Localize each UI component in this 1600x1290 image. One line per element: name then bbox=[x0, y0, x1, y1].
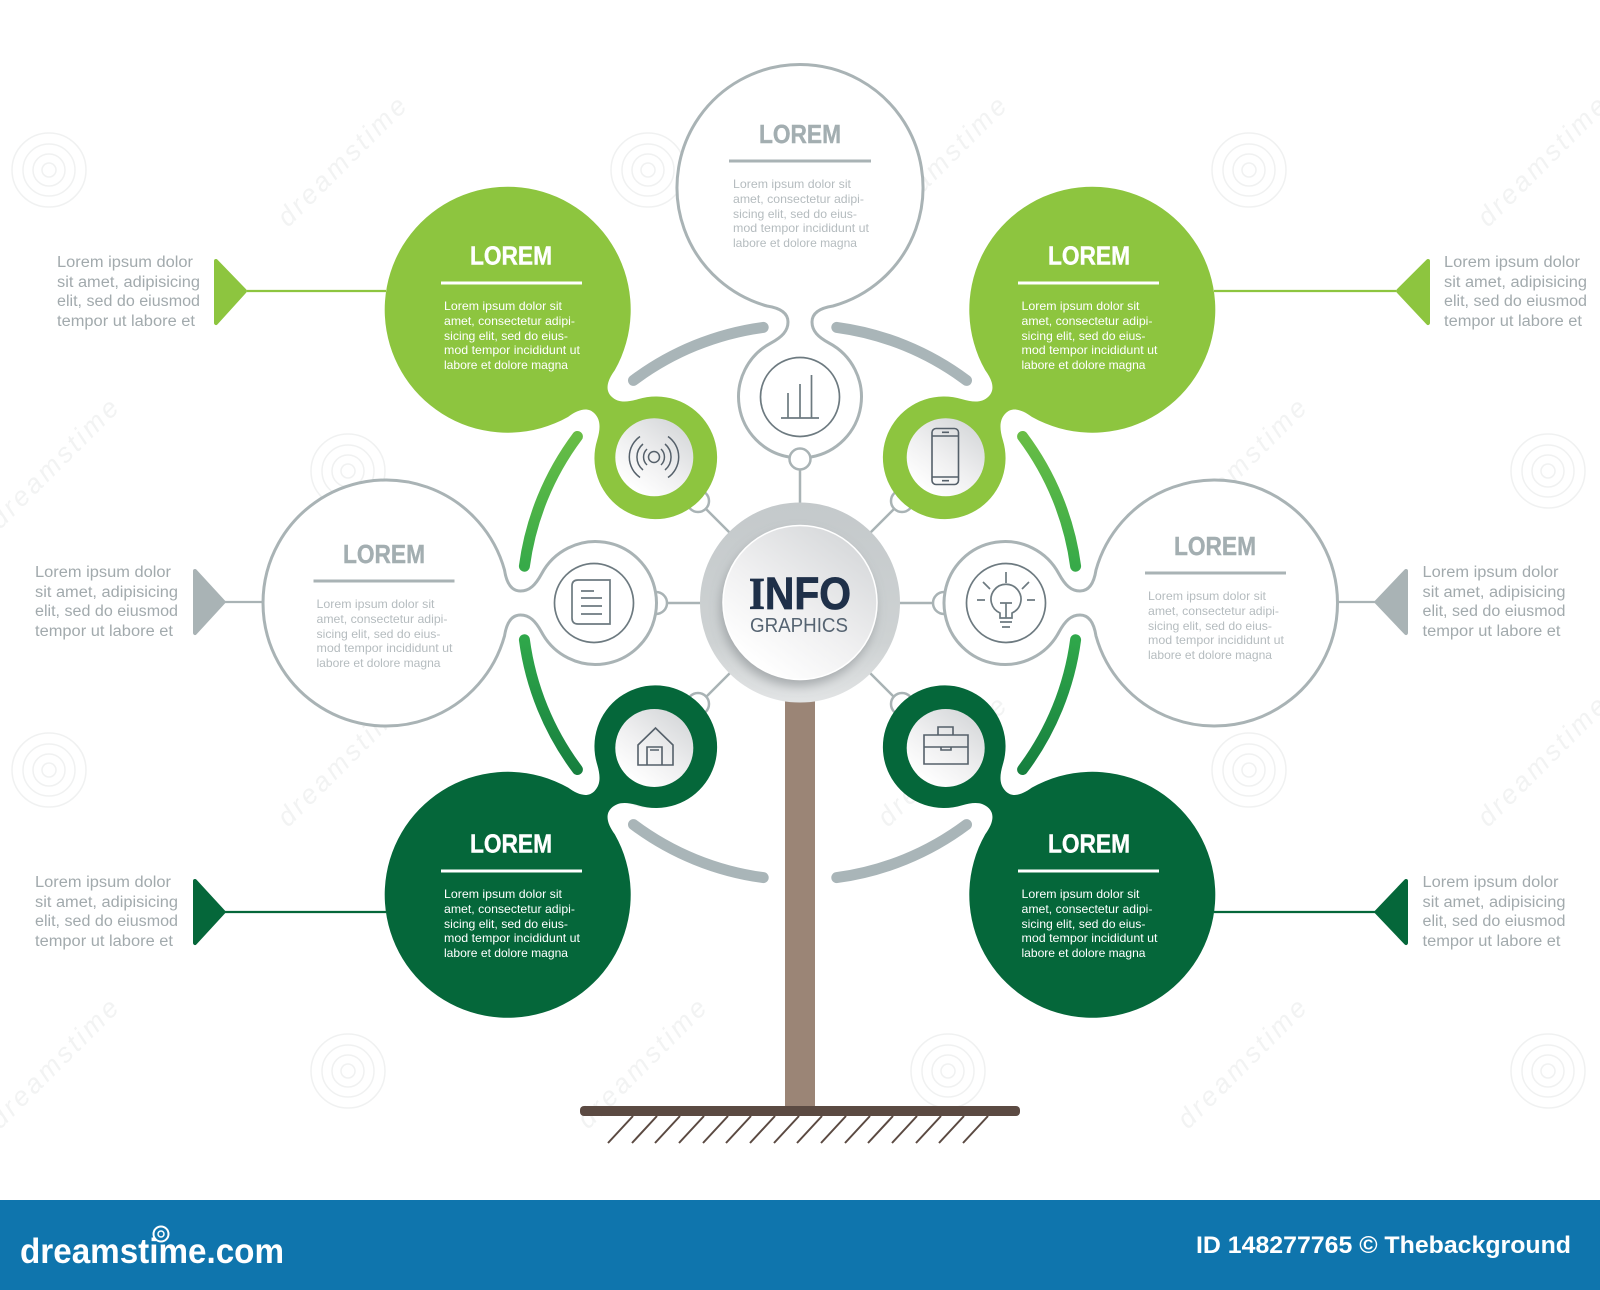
callout: left: elit, sed do eiusmod bbox=[35, 603, 178, 620]
callout: upper right bbox=[1214, 254, 1587, 330]
text: upper right circle bbox=[1018, 240, 1159, 372]
text: right circle: Lorem ipsum dolor sit bbox=[1148, 589, 1267, 603]
callout: lower left bbox=[35, 874, 386, 950]
callout: lower left: elit, sed do eiusmod bbox=[35, 913, 178, 930]
callout: lower left: sit amet, adipisicing bbox=[35, 894, 178, 911]
icon: briefcase bbox=[907, 709, 985, 787]
petal: left outline bbox=[263, 480, 656, 726]
ground with hatching bbox=[580, 1106, 1020, 1143]
text: lower right circle: sicing elit, sed do eius- bbox=[1022, 917, 1146, 931]
text: upper left circle bbox=[441, 240, 582, 372]
connector lines from hub to petals bbox=[645, 470, 955, 715]
icon: bar chart bbox=[760, 358, 840, 436]
text: lower left circle bbox=[441, 828, 582, 960]
callout: lower right: Lorem ipsum dolor bbox=[1422, 874, 1558, 891]
callout: left bbox=[35, 564, 263, 640]
watermark: dreamstime bbox=[871, 691, 1012, 832]
callout: left: tempor ut labore et bbox=[35, 623, 174, 640]
callout: lower right: sit amet, adipisicing bbox=[1422, 894, 1566, 911]
text: left circle: LOREM bbox=[343, 539, 425, 569]
text: upper left circle: mod tempor incididunt ut bbox=[444, 343, 581, 357]
callout: upper right: elit, sed do eiusmod bbox=[1444, 293, 1587, 310]
text: top circle: sicing elit, sed do eius- bbox=[733, 207, 857, 221]
callout: upper left: Lorem ipsum dolor bbox=[57, 254, 193, 271]
text: lower left circle: Lorem ipsum dolor sit bbox=[444, 887, 563, 901]
text: right circle: labore et dolore magna bbox=[1148, 648, 1272, 662]
text: right circle: LOREM bbox=[1174, 531, 1256, 561]
icon: smartphone bbox=[907, 418, 985, 496]
callout: upper right: Lorem ipsum dolor bbox=[1444, 254, 1580, 271]
callout: lower right: elit, sed do eiusmod bbox=[1422, 913, 1566, 930]
watermark: dreamstime bbox=[1171, 393, 1312, 534]
footer image id: ID 148277765 © Thebackground bbox=[1196, 1232, 1571, 1259]
callout: right: sit amet, adipisicing bbox=[1422, 584, 1566, 601]
callout: lower right bbox=[1214, 874, 1566, 950]
callout: upper left: elit, sed do eiusmod bbox=[57, 293, 200, 310]
petal: right outline bbox=[944, 480, 1337, 726]
arcs between petals bbox=[524, 327, 1076, 878]
text: right circle bbox=[1145, 531, 1286, 662]
text: lower right circle: Lorem ipsum dolor sit bbox=[1022, 887, 1140, 901]
callout: upper right: tempor ut labore et bbox=[1444, 313, 1583, 330]
callout: left: sit amet, adipisicing bbox=[35, 584, 178, 601]
text: upper right circle: labore et dolore magna bbox=[1022, 358, 1146, 372]
text: top circle: Lorem ipsum dolor sit bbox=[733, 177, 852, 191]
icon: document bbox=[554, 564, 634, 642]
text: upper left circle: labore et dolore magna bbox=[444, 358, 568, 372]
text: lower right circle: amet, consectetur adipi- bbox=[1022, 902, 1153, 916]
text: left circle: amet, consectetur adipi- bbox=[316, 612, 448, 626]
callout: upper right: sit amet, adipisicing bbox=[1444, 274, 1587, 291]
callout: right: elit, sed do eiusmod bbox=[1422, 603, 1566, 620]
watermark: dreamstime bbox=[271, 691, 412, 832]
callout: upper left bbox=[57, 254, 386, 330]
text: upper left circle: sicing elit, sed do eius- bbox=[444, 329, 568, 343]
watermark: dreamstime bbox=[271, 91, 412, 232]
tree trunk bbox=[785, 690, 815, 1110]
callout: right: Lorem ipsum dolor bbox=[1422, 564, 1558, 581]
text: right circle: sicing elit, sed do eius- bbox=[1148, 619, 1272, 633]
callout: upper left: sit amet, adipisicing bbox=[57, 274, 200, 291]
petal: lower right dark green bbox=[814, 617, 1266, 1069]
petal: upper right green bbox=[814, 136, 1266, 588]
watermark: dreamstime bbox=[571, 993, 712, 1134]
callout: right bbox=[1337, 564, 1566, 640]
text: lower right circle: labore et dolore magna bbox=[1022, 946, 1146, 960]
text: left circle: labore et dolore magna bbox=[316, 656, 441, 670]
hub title INFO: INFO bbox=[749, 568, 851, 619]
icon: light bulb bbox=[966, 564, 1046, 642]
text: top circle: amet, consectetur adipi- bbox=[733, 192, 864, 206]
text: lower right circle bbox=[1018, 828, 1159, 960]
text: lower right circle: mod tempor incididunt ut bbox=[1022, 931, 1158, 945]
petal: upper left green bbox=[334, 136, 786, 588]
footer logo: dreamstime.com bbox=[20, 1232, 284, 1271]
text: left circle: Lorem ipsum dolor sit bbox=[316, 597, 435, 611]
text: lower left circle: mod tempor incididunt ut bbox=[444, 931, 581, 945]
node: top bbox=[790, 448, 810, 470]
text: right circle: amet, consectetur adipi- bbox=[1148, 604, 1279, 618]
callout: lower right: tempor ut labore et bbox=[1422, 933, 1561, 950]
text: lower left circle: labore et dolore magna bbox=[444, 946, 568, 960]
callout: right: tempor ut labore et bbox=[1422, 623, 1561, 640]
text: top circle: labore et dolore magna bbox=[733, 236, 857, 250]
icon: signal bbox=[615, 418, 693, 496]
central hub bbox=[700, 502, 900, 702]
icon: house bbox=[615, 709, 693, 787]
text: upper right circle: LOREM bbox=[1048, 240, 1130, 270]
text: upper right circle: Lorem ipsum dolor sit bbox=[1022, 299, 1140, 313]
text: top circle: LOREM bbox=[759, 119, 841, 149]
text: lower left circle: amet, consectetur adipi- bbox=[444, 902, 575, 916]
text: upper right circle: amet, consectetur adipi- bbox=[1022, 314, 1153, 328]
text: top circle bbox=[729, 119, 871, 250]
callout: lower left: tempor ut labore et bbox=[35, 933, 174, 950]
text: upper left circle: LOREM bbox=[470, 240, 552, 270]
text: right circle: mod tempor incididunt ut bbox=[1148, 633, 1285, 647]
text: upper left circle: Lorem ipsum dolor sit bbox=[444, 299, 563, 313]
callout: lower left: Lorem ipsum dolor bbox=[35, 874, 171, 891]
text: lower left circle: sicing elit, sed do eius- bbox=[444, 917, 568, 931]
text: left circle bbox=[314, 539, 454, 670]
footer band bbox=[0, 1200, 1600, 1290]
hub subtitle GRAPHICS: GRAPHICS bbox=[750, 615, 848, 637]
text: lower left circle: LOREM bbox=[470, 828, 552, 858]
text: lower right circle: LOREM bbox=[1048, 828, 1130, 858]
petal: top outline bbox=[677, 65, 923, 469]
text: top circle: mod tempor incididunt ut bbox=[733, 221, 870, 235]
callout: left: Lorem ipsum dolor bbox=[35, 564, 171, 581]
text: upper right circle: sicing elit, sed do eius- bbox=[1022, 329, 1146, 343]
text: left circle: mod tempor incididunt ut bbox=[316, 641, 453, 655]
watermark: dreamstime bbox=[871, 91, 1012, 232]
callout: upper left: tempor ut labore et bbox=[57, 313, 196, 330]
text: upper right circle: mod tempor incididunt ut bbox=[1022, 343, 1158, 357]
text: upper left circle: amet, consectetur adipi- bbox=[444, 314, 575, 328]
text: left circle: sicing elit, sed do eius- bbox=[316, 627, 440, 641]
watermark: dreamstime bbox=[1171, 993, 1312, 1134]
petal: lower left dark green bbox=[334, 617, 786, 1069]
